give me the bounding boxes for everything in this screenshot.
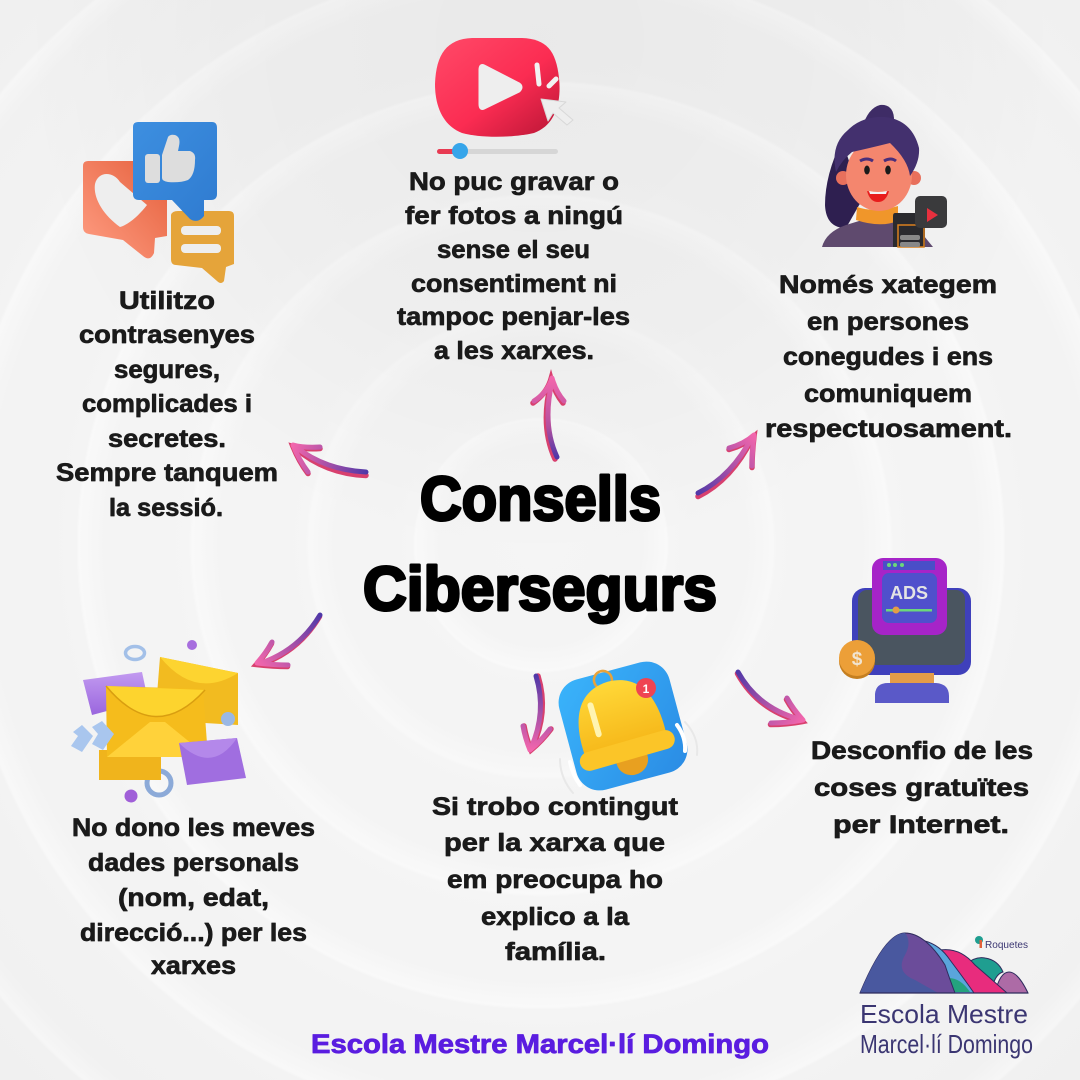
text: consent: consentiment ni — [411, 270, 617, 298]
text: known people: conegudes i ens — [783, 343, 993, 371]
text: consent: No puc gravar o — [409, 168, 619, 196]
icon: envelopes — [71, 640, 246, 802]
text: personal data: No dono les meves — [72, 814, 315, 842]
text: consent: sense el seu — [437, 236, 590, 264]
text: consent — [397, 168, 630, 365]
footer school name: Escola Mestre Marcel·lí Domingo — [311, 1029, 769, 1059]
text: known people: Només xategem — [779, 271, 997, 299]
text: worrying content: em preocupa ho — [447, 866, 663, 894]
icon: social media bubbles — [83, 122, 234, 283]
text: passwords: segures, — [114, 356, 220, 384]
text: consent: fer fotos a ningú — [405, 202, 623, 230]
text: passwords: secretes. — [108, 425, 226, 453]
logo: Escola Mestre Marcel·lí Domingo: Marcel·lí Domingo — [860, 1029, 1033, 1059]
text: worrying content: per la xarxa que — [444, 829, 665, 857]
text: free things: coses gratuïtes — [814, 774, 1029, 802]
title: Cibersegurs — [363, 555, 717, 624]
text: consent: tampoc penjar-les — [397, 303, 630, 331]
text: personal data — [72, 814, 315, 980]
text: free things — [811, 737, 1033, 839]
logo: Escola Mestre Marcel·lí Domingo — [860, 933, 1033, 1059]
icon: ads monitor: ADS — [890, 583, 928, 603]
text: passwords: Sempre tanquem — [56, 459, 278, 487]
icon: ads monitor: $ — [852, 649, 863, 670]
text: known people: en persones — [807, 308, 969, 336]
arrow: down — [523, 676, 551, 750]
text: passwords: Utilitzo — [119, 287, 215, 315]
icon: ads monitor — [839, 558, 971, 703]
text: worrying content: família. — [505, 938, 606, 966]
text: personal data: xarxes — [151, 952, 236, 980]
title — [363, 465, 717, 624]
text: free things: Desconfio de les — [811, 737, 1033, 765]
arrow: up left — [293, 445, 366, 476]
arrow: up — [533, 378, 564, 459]
icon: person with camera — [822, 105, 947, 247]
text: worrying content — [432, 793, 679, 966]
arrow: down left — [256, 615, 320, 666]
arrow: down right — [738, 672, 803, 724]
arrow: up right — [698, 435, 754, 496]
text: passwords: contrasenyes — [79, 321, 255, 349]
icon: notification bell: 1 — [643, 682, 650, 696]
text: known people — [765, 271, 1012, 443]
text: known people: respectuosament. — [765, 415, 1012, 443]
text: personal data: direcció...) per les — [80, 919, 307, 947]
title: Consells — [420, 465, 661, 534]
logo: Escola Mestre Marcel·lí Domingo: Roquetes — [985, 939, 1028, 951]
text: worrying content: explico a la — [481, 903, 630, 931]
icon: video play button — [435, 38, 573, 159]
text: passwords — [56, 287, 278, 522]
text: consent: a les xarxes. — [434, 337, 594, 365]
text: passwords: complicades i — [82, 390, 252, 418]
logo: Escola Mestre Marcel·lí Domingo: Escola Mestre — [860, 999, 1028, 1029]
text: passwords: la sessió. — [109, 494, 223, 522]
text: known people: comuniquem — [804, 380, 972, 408]
text: personal data: dades personals — [88, 849, 299, 877]
text: free things: per Internet. — [833, 811, 1009, 839]
icon: notification bell — [553, 656, 697, 796]
text: worrying content: Si trobo contingut — [432, 793, 679, 821]
text: personal data: (nom, edat, — [118, 884, 269, 912]
